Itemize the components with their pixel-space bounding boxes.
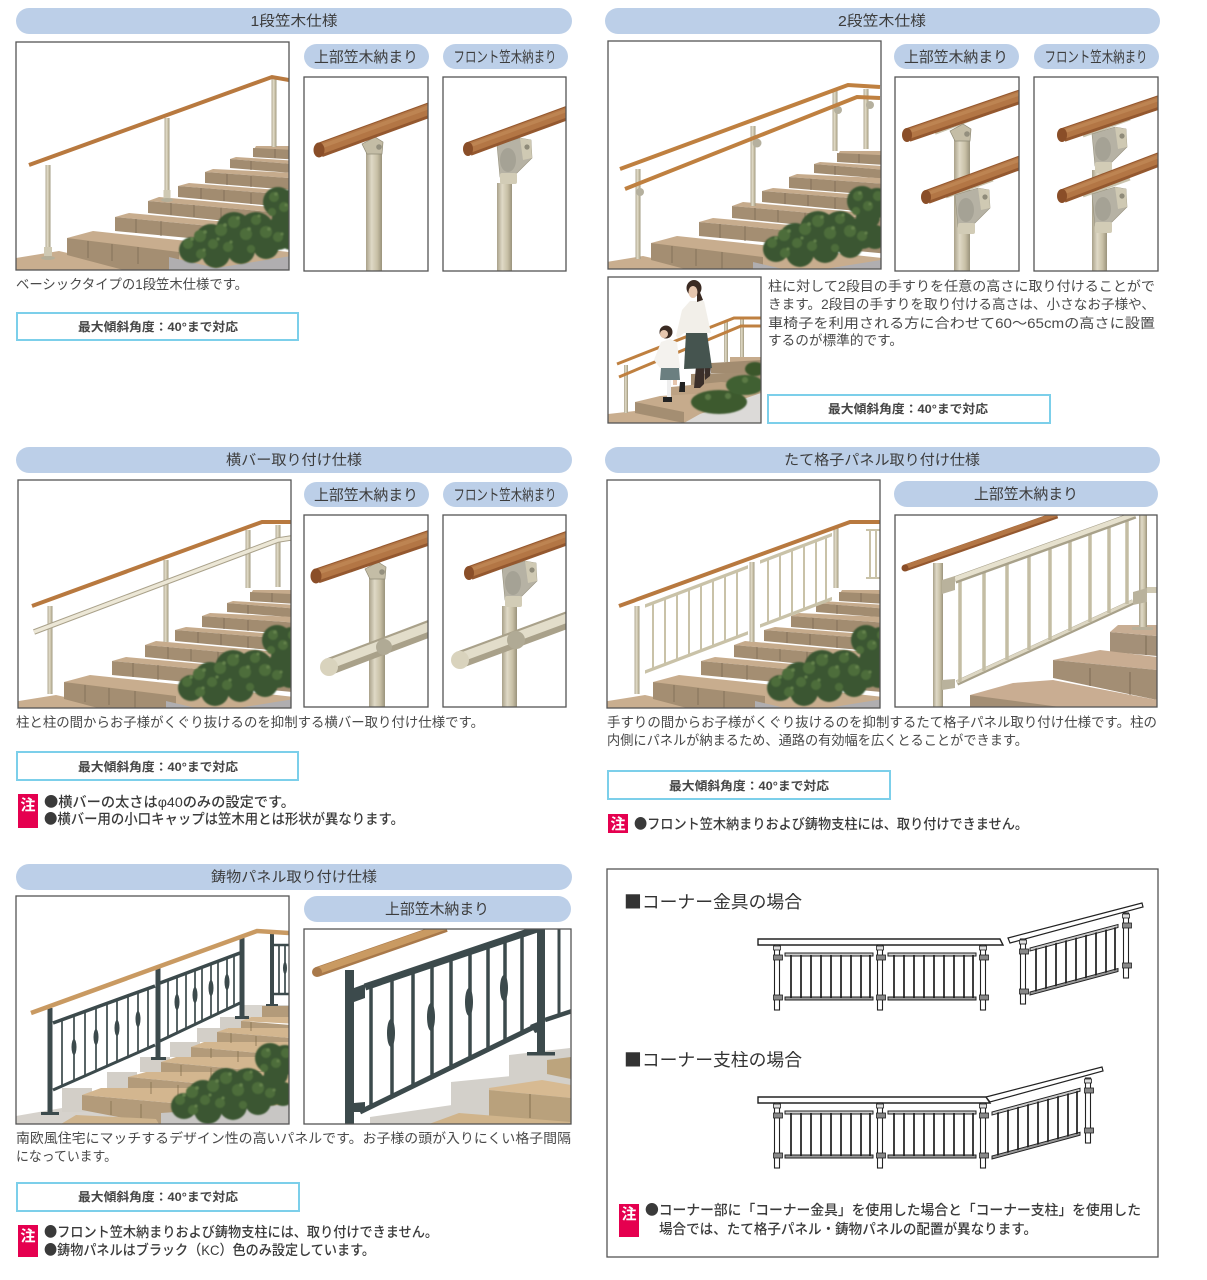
note mark: 注 [20,796,36,814]
panel: corner comparison [607,869,1158,1257]
description text [768,278,1155,348]
label: フロント笠木納まり: フロント笠木納まり [1044,49,1148,66]
detail photo: cast panel [304,926,572,1125]
note mark [18,1225,38,1257]
callout: max slope [608,771,890,799]
description text: 南欧風住宅にマッチするデザイン性の高いパネルです。お子様の頭が入りにくい格子間隔 [16,1130,571,1146]
label: 上部笠木納まり [894,44,1019,69]
photo: mother and child on stairs [608,277,765,423]
label: 上部笠木納まり [304,896,571,922]
label: 上部笠木納まり: 上部笠木納まり [385,901,489,918]
detail photo: top fitting [304,77,432,272]
detail photo: front fitting, two rails [1034,77,1160,272]
label: 上部笠木納まり [304,482,429,507]
note mark [619,1204,639,1237]
label: フロント笠木納まり: フロント笠木納まり [454,49,556,66]
label: フロント笠木納まり [443,482,568,507]
label: 上部笠木納まり: 上部笠木納まり [314,487,418,504]
notes [44,792,404,829]
callout: max slope [17,1183,299,1211]
note mark [18,794,38,828]
panel: 横バー取り付け仕様 [13,447,572,829]
photo: stairs with horizontal bar [13,480,313,726]
description text: 柱と柱の間からお子様がくぐり抜けるのを抑制する横バー取り付け仕様です。 [16,715,484,730]
description text: するのが標準的です。 [768,333,903,348]
callout: max slope [17,313,298,340]
description text: ベーシックタイプの1段笠木仕様です。 [16,277,248,292]
heading: 横バー取り付け仕様: 横バー取り付け仕様 [226,452,363,469]
heading: たて格子パネル取り付け仕様: たて格子パネル取り付け仕様 [784,452,981,469]
detail photo: front fitting with bar [443,515,570,708]
label: フロント笠木納まり: フロント笠木納まり [454,487,556,504]
notes: ●鋳物パネルはブラック（KC）色のみ設定しています。 [44,1240,375,1260]
label: 上部笠木納まり [304,44,429,69]
heading: たて格子パネル取り付け仕様 [605,447,1160,473]
description text: になっています。 [16,1149,117,1164]
description text [607,715,1157,748]
description text [16,1130,571,1164]
diagram: corner bracket [758,903,1143,1010]
callout: max slope: 最大傾斜角度：40°まで対応 [828,401,988,416]
detail photo: top fitting with bar [304,515,431,708]
heading: 2段笠木仕様 [605,8,1160,34]
note: ●フロント笠木納まりおよび鋳物支柱には、取り付けできません。 [634,814,1028,834]
notes: 場合では、たて格子パネル・鋳物パネルの配置が異なります。 [659,1221,1037,1238]
heading: コーナー金具の場合: ■コーナー金具の場合 [624,888,802,914]
label: 上部笠木納まり [894,481,1158,507]
notes: ●コーナー部に「コーナー金具」を使用した場合と「コーナー支柱」を使用した [645,1200,1141,1220]
detail photo: lattice panel [895,514,1157,708]
label: フロント笠木納まり [443,44,568,69]
photo: stairs with lattice panel [602,480,902,726]
photo: stairs with double handrail [600,41,900,287]
callout: max slope [768,395,1050,423]
notes: ●横バー用の小口キャップは笠木用とは形状が異なります。 [44,809,404,829]
heading: 鋳物パネル取り付け仕様 [16,864,572,890]
notes: ●横バーの太さはφ40のみの設定です。 [44,792,295,812]
callout: max slope: 最大傾斜角度：40°まで対応 [78,319,238,334]
heading: コーナー支柱の場合: ■コーナー支柱の場合 [624,1046,802,1072]
description text: 手すりの間からお子様がくぐり抜けるのを抑制するたて格子パネル取り付け仕様です。柱の [607,715,1157,730]
description text: 柱に対して2段目の手すりを任意の高さに取り付けることがで [768,278,1155,294]
heading: 2段笠木仕様: 2段笠木仕様 [838,13,927,30]
diagram: corner post [758,1067,1103,1168]
description text: 内側にパネルが納まるため、通路の有効幅を広くとることができます。 [607,733,1028,748]
heading: 1段笠木仕様: 1段笠木仕様 [250,13,338,30]
callout: max slope [17,752,298,780]
label: 上部笠木納まり: 上部笠木納まり [904,49,1008,66]
panel: 2段笠木仕様 [600,8,1160,423]
notes [645,1200,1141,1238]
detail photo: front fitting [443,77,570,272]
callout: max slope: 最大傾斜角度：40°まで対応 [78,759,238,774]
photo: stairs with cast panel [16,896,316,1136]
note mark [608,814,628,833]
label: 上部笠木納まり: 上部笠木納まり [314,49,418,66]
label: フロント笠木納まり [1034,44,1159,69]
callout: max slope: 最大傾斜角度：40°まで対応 [78,1189,238,1204]
note mark: 注 [621,1205,637,1223]
panel: 鋳物パネル取り付け仕様 [16,864,572,1260]
note mark: 注 [610,815,626,833]
description text: 車椅子を利用される方に合わせて60～65cmの高さに設置 [768,315,1155,331]
heading: 1段笠木仕様 [16,8,572,34]
description text: きます。2段目の手すりを取り付ける高さは、小さなお子様や、 [768,296,1155,312]
note mark: 注 [20,1227,36,1245]
heading: 鋳物パネル取り付け仕様: 鋳物パネル取り付け仕様 [211,869,378,886]
notes [44,1222,438,1260]
detail photo: top fitting, two rails [895,77,1022,272]
notes: ●フロント笠木納まりおよび鋳物支柱には、取り付けできません。 [44,1222,438,1242]
label: 上部笠木納まり: 上部笠木納まり [974,486,1078,503]
photo: stairs with single handrail [16,42,316,282]
panel: 1段笠木仕様 [16,8,572,340]
callout: max slope: 最大傾斜角度：40°まで対応 [669,778,829,793]
heading: 横バー取り付け仕様 [16,447,572,473]
panel: たて格子パネル取り付け仕様 [602,447,1160,834]
